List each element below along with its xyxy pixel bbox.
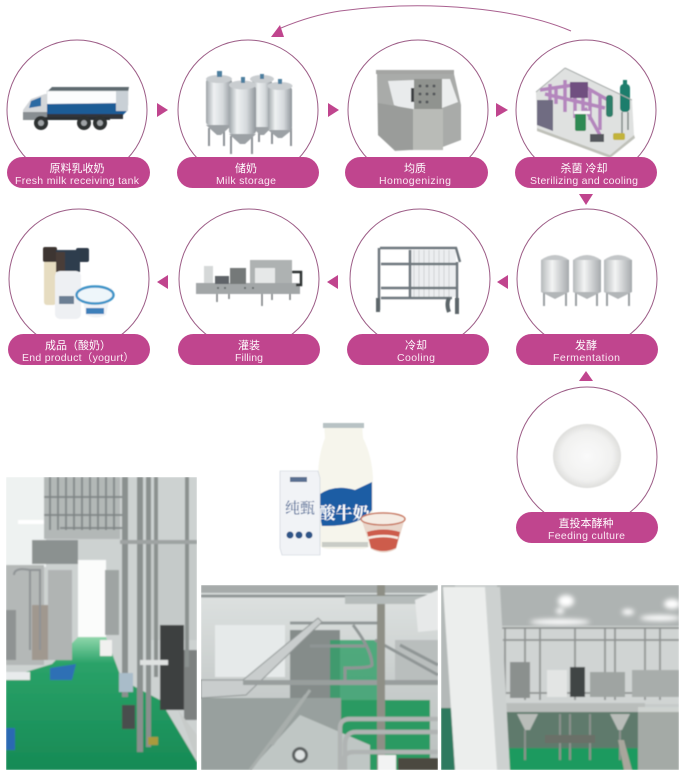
product group: carton, bottle, cup [280, 423, 405, 555]
step: feeding culture: 直投本酵种 [558, 516, 614, 530]
step: fermentation [516, 209, 658, 365]
step: fresh milk receiving tank: 原料乳收奶 [50, 161, 104, 175]
carton: 纯甄 [285, 500, 315, 517]
step: cooling [347, 209, 490, 365]
step: end product: 成品（酸奶） [45, 338, 111, 352]
arrow [157, 275, 168, 289]
step: fresh milk receiving tank: Fresh milk receiving tank [15, 175, 140, 187]
icon: sterilizer unit [536, 68, 635, 158]
step: fermentation: Fermentation [553, 352, 620, 364]
icon: culture powder [553, 424, 621, 488]
step: fermentation: 发酵 [575, 338, 597, 352]
photo: pipework over green floor [201, 585, 438, 770]
arrow [328, 103, 339, 117]
icon: fermentation tanks [541, 255, 632, 306]
step: homogenizing [345, 40, 488, 188]
step: filling: Filling [235, 352, 263, 364]
arrow [327, 275, 338, 289]
step: fresh milk receiving tank [7, 40, 150, 188]
arrow [497, 275, 508, 289]
return arrow: sterilizing back to milk storage [271, 6, 571, 37]
icon: homogenizer [376, 70, 461, 151]
icon: filling machine [196, 260, 301, 306]
arrow [579, 194, 593, 205]
step: filling: 灌装 [238, 339, 260, 352]
icon: storage tanks [206, 71, 292, 154]
step: cooling: Cooling [397, 352, 435, 364]
icon: milk truck [23, 87, 129, 130]
step: homogenizing: 均质 [404, 162, 426, 175]
icon: plate heat exchanger [378, 248, 460, 314]
photo: tanks hall with white pillar [441, 585, 680, 770]
step: sterilizing and cooling: 杀菌 冷却 [560, 161, 608, 175]
step: feeding culture [516, 387, 658, 543]
step: milk storage: Milk storage [216, 175, 276, 187]
step: end product: End product（yogurt） [22, 352, 134, 364]
step: homogenizing: Homogenizing [379, 175, 451, 187]
step: milk storage: 储奶 [235, 161, 257, 175]
cup [361, 513, 405, 552]
step: feeding culture: Feeding culture [548, 530, 625, 542]
step: sterilizing and cooling: Sterilizing and cooling [530, 175, 638, 187]
step: cooling: 冷却 [405, 339, 427, 352]
arrow [496, 103, 508, 117]
photo: factory corridor with green floor [6, 477, 197, 770]
step: filling [178, 209, 320, 365]
arrow [579, 371, 593, 381]
arrow [157, 103, 168, 117]
step: sterilizing and cooling [515, 40, 657, 188]
step: milk storage [177, 40, 319, 188]
icon: yogurt bottles and cup [43, 247, 114, 319]
bottle: 酸牛奶 [318, 503, 370, 523]
step: end product [8, 209, 150, 365]
